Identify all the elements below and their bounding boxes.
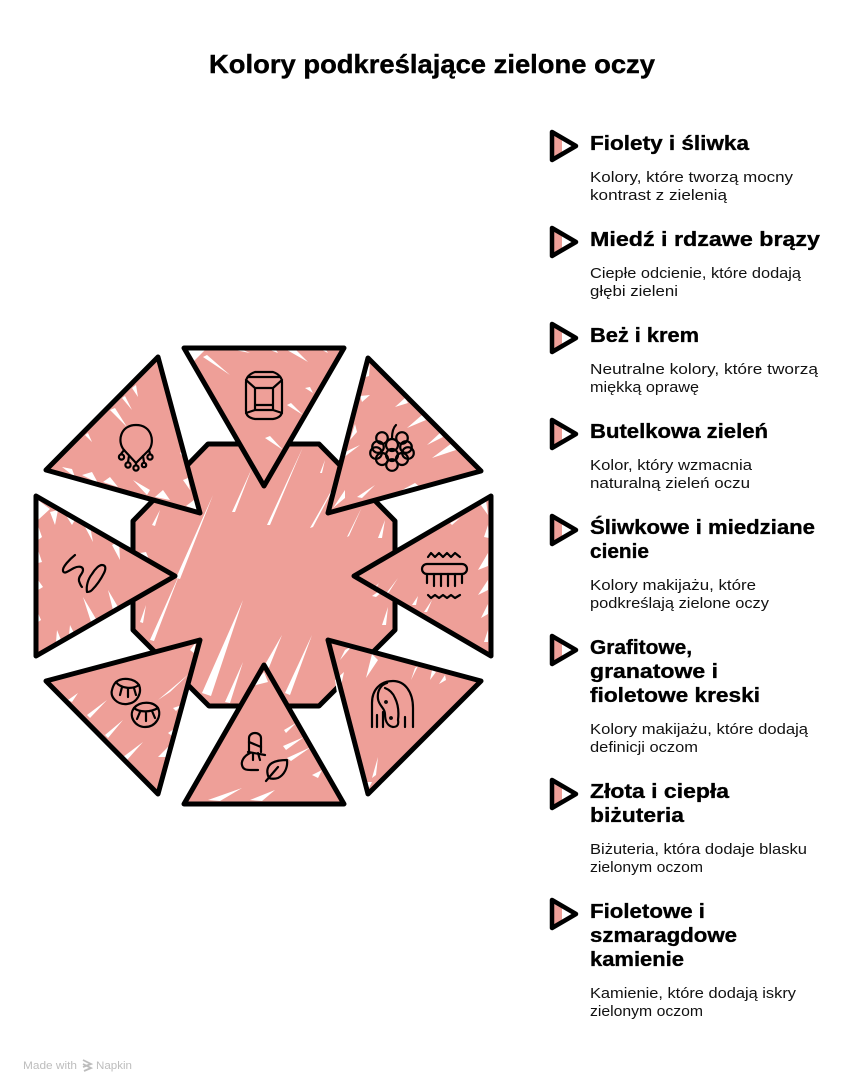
list item: Fioletowe i szmaragdowe kamienie: kamienie <box>590 949 684 971</box>
icon: bullet arrow <box>552 132 576 160</box>
list item: Fioletowe i szmaragdowe kamienie: szmaragdowe <box>590 925 737 947</box>
icon: raspberry <box>370 425 414 471</box>
icon: bottle and leaf <box>242 733 287 781</box>
list item: Grafitowe, granatowe i fioletowe kreski: fioletowe kreski <box>590 685 760 707</box>
list item: Złota i ciepła biżuteria: zielonym oczom <box>590 859 703 876</box>
list item: Beż i krem <box>552 324 819 396</box>
triangle: top-left with necklace icon <box>46 357 200 513</box>
list item: Butelkowa zieleń: Butelkowa zieleń <box>590 421 768 443</box>
list item: Beż i krem: miękką oprawę <box>590 379 699 396</box>
icon: eyes <box>112 679 159 727</box>
icon: bullet arrow <box>552 636 576 664</box>
triangle: bottom-right with face icon <box>328 640 481 794</box>
list item: Fiolety i śliwka: Fiolety i śliwka <box>590 133 750 155</box>
triangle: bottom with bottle and leaf icon <box>184 665 344 804</box>
footer: Made with Napkin: Napkin <box>96 1060 132 1072</box>
footer: Made with Napkin <box>23 1060 132 1072</box>
footer: Made with Napkin: Made with <box>23 1060 77 1072</box>
central octagon <box>133 444 398 706</box>
list item: Fioletowe i szmaragdowe kamienie: Kamienie, które dodają iskry <box>590 985 797 1002</box>
icon: bullet arrow <box>552 324 576 352</box>
list item: Śliwkowe i miedziane cienie: Śliwkowe i miedziane <box>590 515 815 539</box>
title: Kolory podkreślające zielone oczy <box>209 49 656 79</box>
icon: necklace <box>119 425 153 471</box>
list item: Złota i ciepła biżuteria: Złota i ciepła <box>590 781 730 803</box>
list item: Grafitowe, granatowe i fioletowe kreski <box>552 636 809 756</box>
list item: Śliwkowe i miedziane cienie: Kolory makijażu, które <box>590 577 756 594</box>
list item: Butelkowa zieleń: naturalną zieleń oczu <box>590 475 750 492</box>
icon: bullet arrow <box>552 780 576 808</box>
icon: bullet arrow <box>552 900 576 928</box>
list item: Fioletowe i szmaragdowe kamienie: Fioletowe i <box>590 901 705 923</box>
list item: Fiolety i śliwka <box>552 132 794 204</box>
list item: Beż i krem: Beż i krem <box>590 325 699 347</box>
list item: Butelkowa zieleń: Kolor, który wzmacnia <box>590 457 753 474</box>
triangle: left with squiggle icon <box>36 496 175 656</box>
list item: Złota i ciepła biżuteria: Biżuteria, która dodaje blasku <box>590 841 807 858</box>
list item: Śliwkowe i miedziane cienie: podkreślają zielone oczy <box>590 595 770 612</box>
triangle: top-right with raspberry icon <box>328 358 481 513</box>
list item: Butelkowa zieleń <box>552 420 768 492</box>
list item: Grafitowe, granatowe i fioletowe kreski: Grafitowe, <box>590 637 692 659</box>
list item: Fiolety i śliwka: Kolory, które tworzą mocny <box>590 169 794 186</box>
icon: face with hair <box>372 681 413 727</box>
list item: Złota i ciepła biżuteria: biżuteria <box>590 805 685 827</box>
list item: Fioletowe i szmaragdowe kamienie <box>552 900 797 1020</box>
triangle: right with comb icon <box>354 496 491 656</box>
list item: Miedź i rdzawe brązy: Miedź i rdzawe brązy <box>590 229 821 251</box>
icon: bullet arrow <box>552 420 576 448</box>
triangle: bottom-left with eyes icon <box>46 640 200 794</box>
list item: Miedź i rdzawe brązy <box>552 228 821 300</box>
icon: bullet arrow <box>552 516 576 544</box>
list item: Grafitowe, granatowe i fioletowe kreski: granatowe i <box>590 661 718 683</box>
icon: squiggle <box>63 555 105 592</box>
triangle: top with gem icon <box>184 348 344 486</box>
list item: Śliwkowe i miedziane cienie <box>552 515 815 612</box>
list item: Fioletowe i szmaragdowe kamienie: zielonym oczom <box>590 1003 703 1020</box>
list item: Miedź i rdzawe brązy: Ciepłe odcienie, które dodają <box>590 265 802 282</box>
icon: gem <box>246 372 282 419</box>
icon: comb <box>422 553 467 598</box>
list item: Grafitowe, granatowe i fioletowe kreski: definicji oczom <box>590 739 698 756</box>
list item: Śliwkowe i miedziane cienie: cienie <box>590 541 649 563</box>
list item: Grafitowe, granatowe i fioletowe kreski: Kolory makijażu, które dodają <box>590 721 809 738</box>
list item: Miedź i rdzawe brązy: głębi zieleni <box>590 283 678 300</box>
icon: Napkin logo <box>83 1060 91 1071</box>
icon: bullet arrow <box>552 228 576 256</box>
list item: Fiolety i śliwka: kontrast z zielenią <box>590 187 728 204</box>
list item: Złota i ciepła biżuteria <box>552 780 807 876</box>
list item: Beż i krem: Neutralne kolory, które tworzą <box>590 361 819 378</box>
